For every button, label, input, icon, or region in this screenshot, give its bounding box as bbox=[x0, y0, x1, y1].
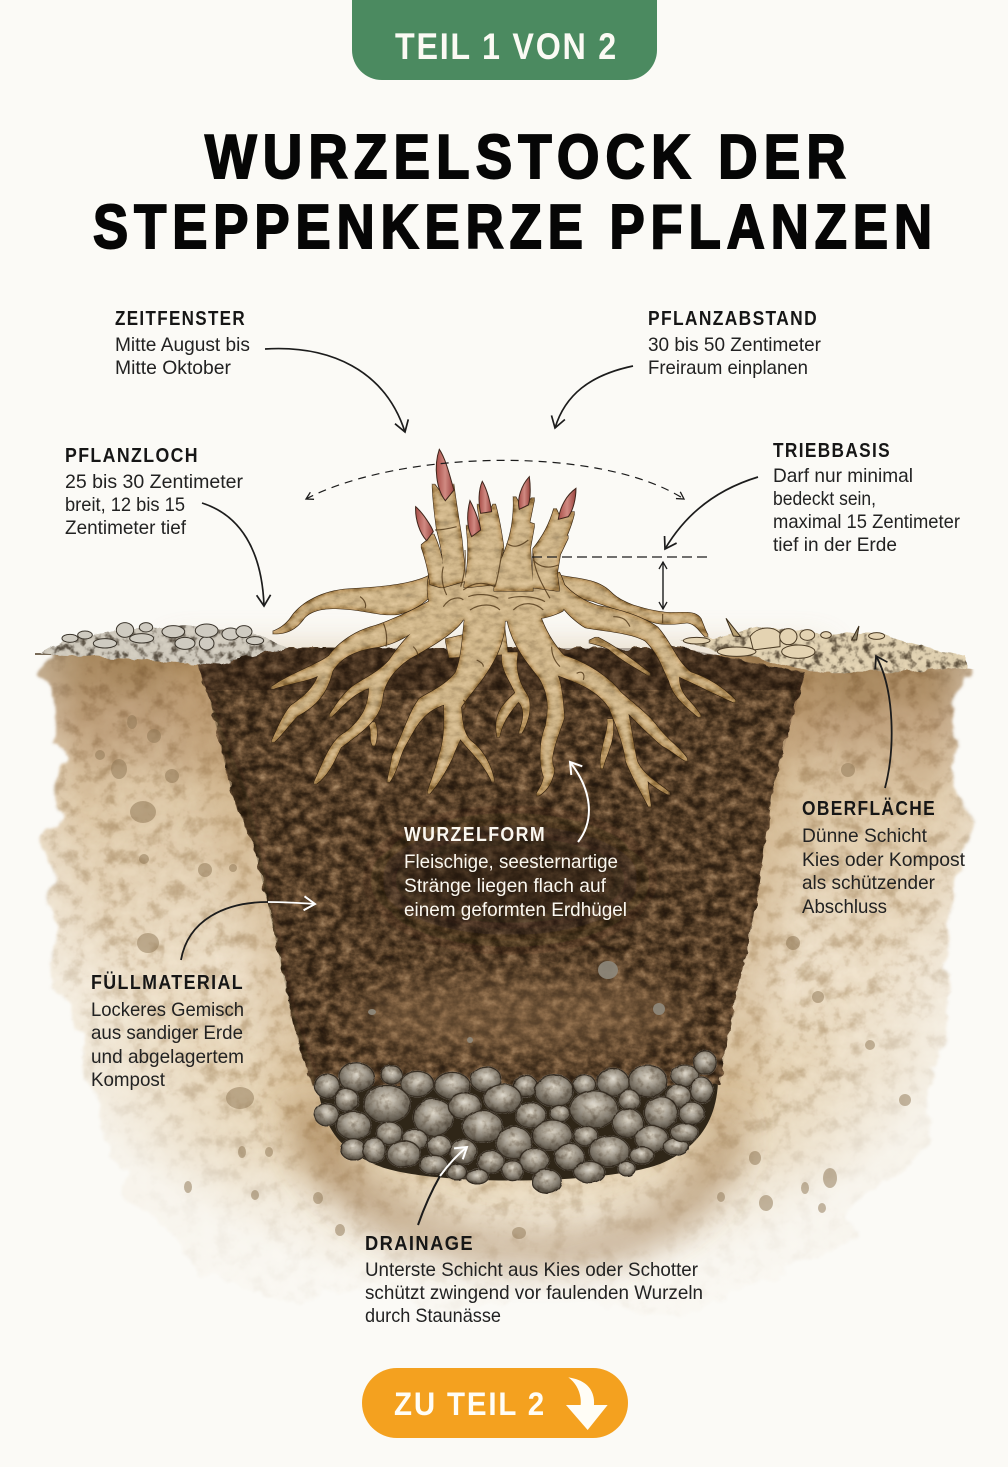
label: Wurzelform: einem geformten Erdhügel bbox=[404, 899, 627, 921]
label: Triebbasis: TRIEBBASIS bbox=[773, 439, 891, 462]
label: Oberfläche: Dünne Schicht bbox=[802, 825, 928, 847]
label: Füllmaterial: aus sandiger Erde bbox=[91, 1022, 243, 1044]
label: Zeitfenster: ZEITFENSTER bbox=[115, 307, 246, 330]
label: Wurzelform: Fleischige, seesternartige bbox=[404, 851, 618, 873]
spacing arc bbox=[306, 460, 684, 499]
label: Triebbasis: maximal 15 Zentimeter bbox=[773, 511, 960, 533]
label: Füllmaterial bbox=[91, 971, 244, 1091]
title: WURZELSTOCK DER bbox=[205, 123, 852, 192]
shoot buds bbox=[416, 449, 576, 541]
depth arrow bbox=[662, 562, 664, 609]
pit rim shadow in sand bbox=[290, 1100, 739, 1264]
label: Oberfläche: Abschluss bbox=[802, 896, 887, 918]
label: Wurzelform: WURZELFORM bbox=[404, 823, 546, 846]
lower small roots bbox=[370, 627, 650, 768]
label: Triebbasis: bedeckt sein, bbox=[773, 488, 876, 510]
gravel bed shadow bbox=[316, 1070, 718, 1180]
label: Drainage bbox=[365, 1232, 703, 1327]
label: Füllmaterial: Lockeres Gemisch bbox=[91, 999, 244, 1021]
label: Pflanzabstand: 30 bis 50 Zentimeter bbox=[648, 334, 821, 356]
label: Zeitfenster bbox=[115, 307, 250, 379]
label: Triebbasis: tief in der Erde bbox=[773, 534, 897, 556]
arrow: oberflaeche bbox=[876, 656, 892, 788]
button: Zu Teil 2: ZU TEIL 2 bbox=[394, 1386, 546, 1422]
label: Füllmaterial: Kompost bbox=[91, 1069, 166, 1091]
upper flat roots bbox=[273, 577, 707, 637]
sandy subsoil wash bbox=[36, 655, 976, 1312]
soil fill bbox=[197, 648, 805, 1085]
label: Pflanzabstand bbox=[648, 307, 821, 379]
label: Pflanzloch bbox=[65, 444, 243, 539]
ground surface left: gravel mulch bbox=[40, 623, 287, 665]
label: Zeitfenster: Mitte August bis bbox=[115, 334, 250, 356]
sand pebble stains bbox=[95, 715, 911, 1239]
icon: curved down arrow bbox=[566, 1377, 608, 1430]
ground line left bbox=[35, 653, 197, 655]
label: Zeitfenster: Mitte Oktober bbox=[115, 357, 231, 379]
arrow: fuellmaterial bbox=[181, 902, 315, 960]
label: Triebbasis bbox=[773, 439, 960, 556]
label: Drainage: DRAINAGE bbox=[365, 1232, 474, 1255]
label: Oberfläche: OBERFLÄCHE bbox=[802, 797, 936, 820]
arrow: wurzelform bbox=[570, 762, 589, 842]
soil specks bbox=[368, 961, 665, 1043]
ground surface right: compost layer bbox=[680, 618, 967, 672]
arrow: pflanzabstand bbox=[555, 366, 633, 428]
banner: Teil 1 von 2 bbox=[352, 0, 657, 80]
label: Pflanzloch: breit, 12 bis 15 bbox=[65, 494, 185, 516]
label: Drainage: Unterste Schicht aus Kies oder Schotter bbox=[365, 1259, 698, 1281]
label: Pflanzloch: Zentimeter tief bbox=[65, 517, 187, 539]
label: Füllmaterial: und abgelagertem bbox=[91, 1046, 244, 1068]
crown stems bbox=[422, 485, 573, 590]
arrow: drainage bbox=[418, 1147, 467, 1225]
label: Oberfläche bbox=[802, 797, 966, 918]
label: Oberfläche: Kies oder Kompost bbox=[802, 849, 966, 871]
root stock bbox=[272, 449, 735, 807]
arrow: zeitfenster bbox=[265, 349, 405, 432]
title bbox=[93, 123, 938, 262]
label: Füllmaterial: FÜLLMATERIAL bbox=[91, 971, 244, 994]
root wrinkles bbox=[360, 527, 663, 710]
button: Zu Teil 2 bbox=[362, 1368, 628, 1438]
sand halo around pit bbox=[190, 665, 805, 1090]
soil shading bbox=[180, 640, 820, 1090]
label: Wurzelform bbox=[404, 823, 627, 921]
label: Pflanzabstand: PFLANZABSTAND bbox=[648, 307, 818, 330]
label: Triebbasis: Darf nur minimal bbox=[773, 465, 913, 487]
label: Drainage: schützt zwingend vor faulenden Wurzeln bbox=[365, 1282, 703, 1304]
banner: Teil 1 von 2: TEIL 1 VON 2 bbox=[395, 26, 618, 67]
arrow: pflanzloch bbox=[202, 503, 264, 606]
depth guide line bbox=[532, 556, 707, 558]
arrow: triebbasis bbox=[665, 477, 758, 549]
label: Pflanzloch: PFLANZLOCH bbox=[65, 444, 199, 467]
label: Wurzelform: Stränge liegen flach auf bbox=[404, 875, 607, 897]
label: Oberfläche: als schützender bbox=[802, 872, 935, 894]
label: Pflanzloch: 25 bis 30 Zentimeter bbox=[65, 471, 243, 493]
gravel drainage layer bbox=[315, 1051, 716, 1193]
label: Drainage: durch Staunässe bbox=[365, 1305, 501, 1327]
main fleshy roots and crown mass bbox=[272, 573, 735, 807]
label: Pflanzabstand: Freiraum einplanen bbox=[648, 357, 808, 379]
